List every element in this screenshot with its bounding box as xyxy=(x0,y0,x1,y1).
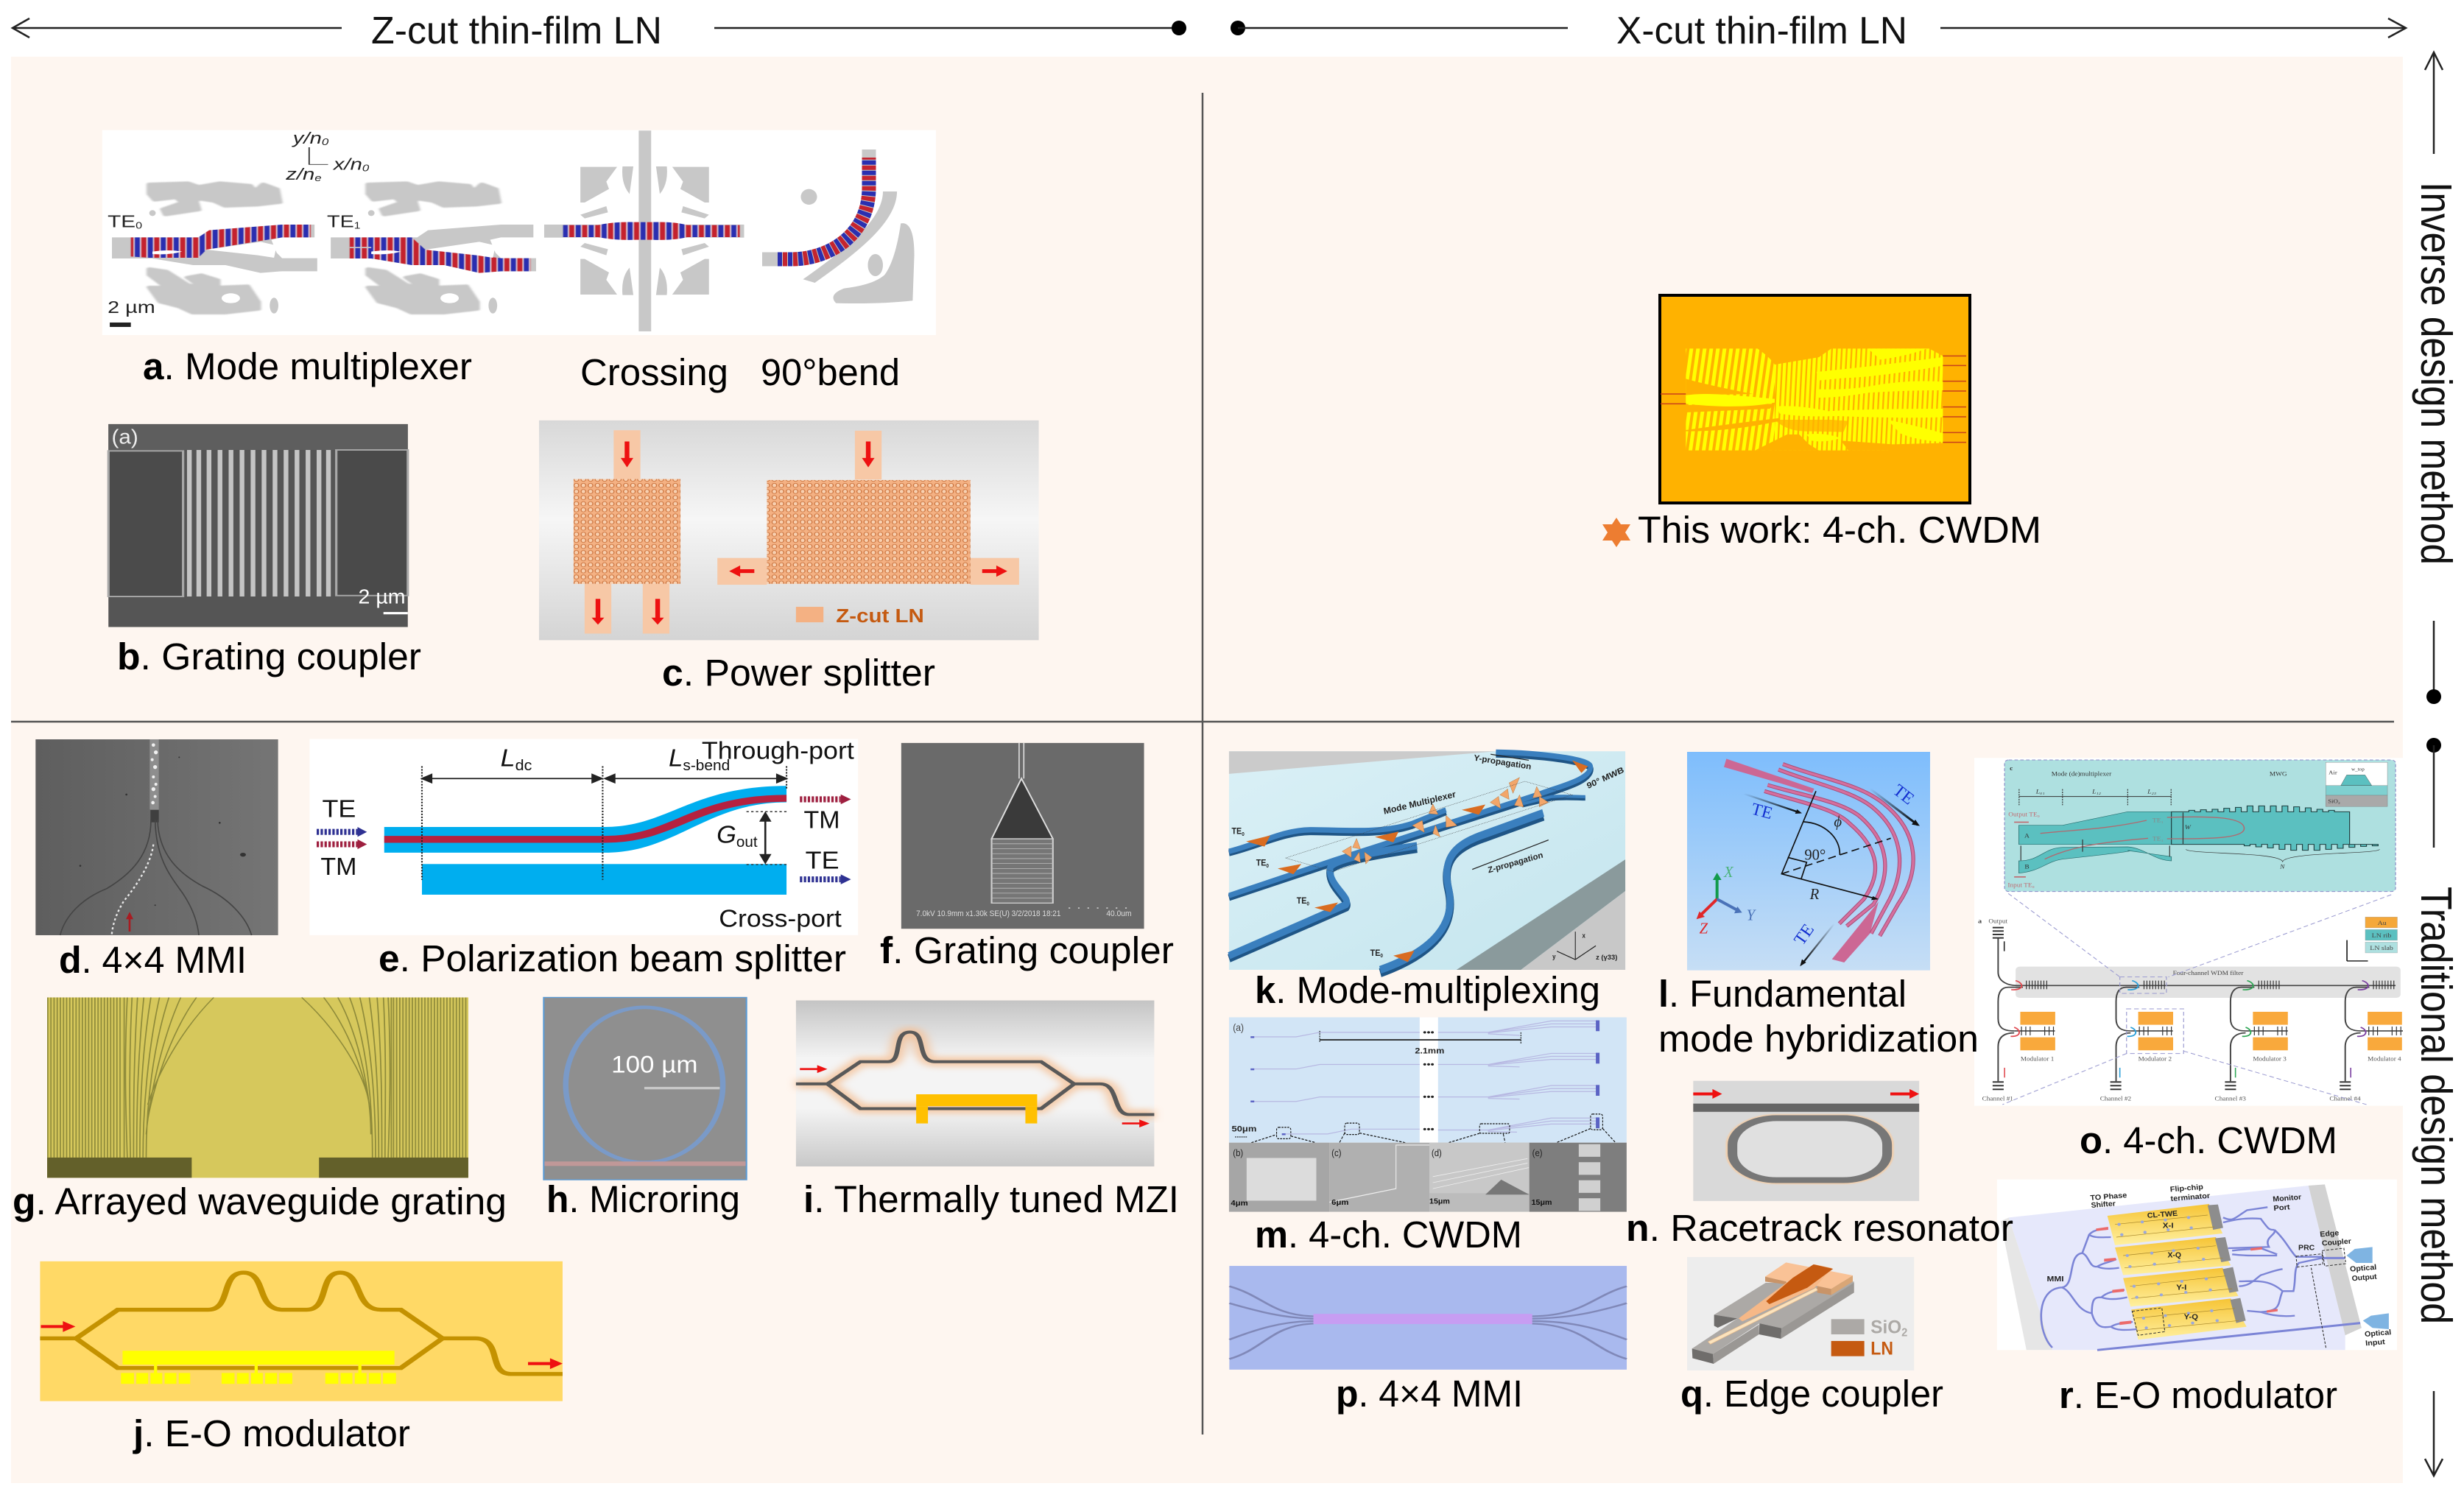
top axis: Z-cut arrow xyxy=(13,18,1186,38)
caption o: o. 4-ch. CWDM xyxy=(2080,1119,2337,1161)
panel a: mode multiplexer, crossing, bend xyxy=(102,129,936,335)
panel r: E-O modulator schematic: PRC xyxy=(2298,1244,2315,1252)
panel: this work 4-channel CWDM layout xyxy=(1660,295,1970,503)
inset: mode demultiplexer and MWG: Input TE₀ xyxy=(2007,881,2035,888)
field axes label: y/n xyxy=(293,129,340,147)
panel k: mode multiplexing 3D layout: Y-propagation xyxy=(1474,753,1532,772)
panel l: fundamental mode hybridization: TE xyxy=(1749,800,1775,823)
legend: LN slab xyxy=(2370,945,2393,951)
panel h: microring xyxy=(543,997,747,1180)
panel m: 4-channel CWDM micrograph: ••• xyxy=(1423,1028,1435,1038)
vertical heading: Inverse design method: Inverse design method xyxy=(2412,182,2461,565)
panel o: 4-channel CWDM schematic: Output xyxy=(1988,918,2007,924)
panel r: E-O modulator schematic: Y-Q xyxy=(2184,1313,2198,1321)
panel e: polarization beam splitter: TM xyxy=(804,806,840,834)
panel m: 4-channel CWDM micrograph: 4μm xyxy=(1231,1199,1248,1207)
inset: mode demultiplexer and MWG: B xyxy=(2024,863,2030,870)
panel j: E-O modulator xyxy=(40,1261,563,1401)
panel o: 4-channel CWDM schematic: Channel #4 xyxy=(2329,1095,2361,1102)
caption f: f. Grating coupler xyxy=(880,929,1174,971)
field axes label: 1 xyxy=(354,220,361,230)
inset: mode demultiplexer and MWG: N xyxy=(2279,863,2286,870)
field axes label: 0 xyxy=(362,163,369,174)
panel p: 4x4 MMI micrograph xyxy=(1229,1266,1627,1370)
caption b: b. Grating coupler xyxy=(117,636,421,677)
panel e: polarization beam splitter: G xyxy=(717,821,747,848)
panel d: 4x4 MMI micrograph xyxy=(35,739,278,935)
panel k: mode multiplexing 3D layout: x xyxy=(1583,932,1585,939)
panel r: E-O modulator schematic: Port xyxy=(2273,1203,2291,1213)
field axes label: 0 xyxy=(135,220,142,230)
panel l: fundamental mode hybridization xyxy=(1687,752,1930,971)
caption r: r. E-O modulator xyxy=(2059,1374,2337,1416)
inset: mode demultiplexer and MWG: A xyxy=(2024,832,2030,839)
panel c: power splitter xyxy=(539,420,1039,640)
panel l: fundamental mode hybridization: Z xyxy=(1700,921,1708,937)
panel k: mode multiplexing 3D layout: 90° MWB xyxy=(1585,765,1625,791)
panel o: 4-channel CWDM schematic: Modulator 4 xyxy=(2368,1055,2401,1062)
heading: X-cut thin-film LN: X-cut thin-film LN xyxy=(1616,10,1907,52)
panel h: microring: 100 µm xyxy=(611,1052,697,1078)
panel o: 4-channel CWDM schematic: Modulator 1 xyxy=(2021,1055,2055,1062)
panel e: polarization beam splitter xyxy=(309,737,858,935)
modulators and gratings xyxy=(2021,981,2401,1035)
panel e: polarization beam splitter: TE xyxy=(806,847,839,874)
top axis: X-cut arrow xyxy=(1231,18,2406,38)
panel o: 4-channel CWDM schematic xyxy=(1974,758,2404,1106)
panel l: fundamental mode hybridization: X xyxy=(1723,865,1734,881)
inset: mode demultiplexer and MWG: W xyxy=(2185,824,2191,831)
four-channel WDM filter band xyxy=(2016,967,2401,998)
caption h: h. Microring xyxy=(546,1178,740,1220)
panel o: 4-channel CWDM schematic: Modulator 2 xyxy=(2139,1055,2172,1062)
caption k: k. Mode-multiplexing xyxy=(1255,969,1600,1011)
panel i: thermally tuned MZI xyxy=(796,1001,1154,1166)
panel m: 4-channel CWDM micrograph: ••• xyxy=(1423,1125,1435,1135)
inset: mode demultiplexer and MWG: L₁₂ xyxy=(2091,788,2101,795)
caption e: e. Polarization beam splitter xyxy=(379,937,846,979)
legend: LN rib xyxy=(2372,932,2392,939)
panel r: E-O modulator schematic xyxy=(1997,1180,2397,1350)
panel f: SEM grating coupler xyxy=(901,743,1144,929)
field axes label: TE xyxy=(108,212,156,231)
panel o: 4-channel CWDM schematic: Four-channel WDM filter xyxy=(2173,970,2243,976)
panel r: E-O modulator schematic: Shifter xyxy=(2091,1200,2116,1210)
panel e: polarization beam splitter: L xyxy=(501,744,522,772)
panel e: polarization beam splitter: out xyxy=(736,834,758,850)
panel b: SEM grating coupler xyxy=(108,424,408,627)
panel m: 4-channel CWDM micrograph: (c) xyxy=(1331,1147,1342,1158)
panel k: mode multiplexing 3D layout: 0 xyxy=(1380,954,1383,959)
panel r: E-O modulator schematic: Optical xyxy=(2350,1263,2377,1273)
panel r: E-O modulator schematic: CL-TWE xyxy=(2147,1209,2178,1220)
panel r: E-O modulator schematic: Output xyxy=(2351,1272,2378,1283)
panel q: edge coupler xyxy=(1687,1257,1914,1370)
panel l: fundamental mode hybridization: R xyxy=(1809,887,1820,903)
panel q: edge coupler: SiO xyxy=(1870,1317,1903,1337)
panel m: 4-channel CWDM micrograph: ••• xyxy=(1423,1060,1435,1070)
inset: mode demultiplexer and MWG: w_top xyxy=(2351,767,2365,772)
panel r: E-O modulator schematic: TO Phase xyxy=(2090,1191,2127,1203)
legend xyxy=(2365,917,2397,953)
panel e: polarization beam splitter: Through-port xyxy=(702,737,854,764)
panel r: E-O modulator schematic: MMI xyxy=(2047,1275,2064,1284)
panel o: 4-channel CWDM schematic: a xyxy=(1978,918,1982,924)
field axes label: 0 xyxy=(322,136,328,147)
panel b: SEM grating coupler: 2 µm xyxy=(359,585,406,608)
panel l: fundamental mode hybridization: ϕ xyxy=(1834,814,1842,831)
panel k: mode multiplexing 3D layout: TE xyxy=(1256,859,1266,868)
panel e: polarization beam splitter: TM xyxy=(320,853,356,881)
panel n: racetrack resonator xyxy=(1693,1081,1919,1201)
caption c: c. Power splitter xyxy=(662,652,935,694)
panel k: mode multiplexing 3D layout: 0 xyxy=(1306,901,1309,907)
panel k: mode multiplexing 3D layout: Z-propagation xyxy=(1487,851,1544,876)
panel e: polarization beam splitter: s-bend xyxy=(683,757,730,773)
inset: mode demultiplexer and MWG: TE₁ xyxy=(2153,835,2164,842)
field axes label: 2 µm xyxy=(108,298,155,317)
caption this work: This work: 4-ch. CWDM xyxy=(1638,509,2041,551)
panel o: 4-channel CWDM schematic: Channel #3 xyxy=(2215,1095,2246,1102)
panel l: fundamental mode hybridization: Y xyxy=(1747,907,1757,923)
panel r: E-O modulator schematic: terminator xyxy=(2170,1191,2211,1203)
caption q: q. Edge coupler xyxy=(1680,1373,1943,1415)
panel l: fundamental mode hybridization: TE xyxy=(1890,781,1918,809)
panel r: E-O modulator schematic: X-I xyxy=(2163,1222,2174,1230)
panel r: E-O modulator schematic: Monitor xyxy=(2273,1193,2302,1203)
panel r: E-O modulator schematic: Coupler xyxy=(2321,1237,2351,1247)
panel q: edge coupler: LN xyxy=(1870,1339,1893,1359)
panel m: 4-channel CWDM micrograph: (a) xyxy=(1233,1021,1244,1033)
caption d: d. 4×4 MMI xyxy=(59,939,247,981)
panel k: mode multiplexing 3D layout: z (γ33) xyxy=(1596,954,1618,961)
panel r: E-O modulator schematic: Input xyxy=(2365,1338,2386,1348)
panel m: 4-channel CWDM micrograph: 2.1mm xyxy=(1415,1047,1445,1056)
panel o: 4-channel CWDM schematic: Modulator 3 xyxy=(2253,1055,2287,1062)
panel k: mode multiplexing 3D layout: Mode Multiplexer xyxy=(1383,790,1457,817)
inset: mode demultiplexer and MWG: SiO₂ xyxy=(2328,798,2340,804)
legend: Au xyxy=(2378,920,2387,926)
field axes label xyxy=(108,129,369,327)
caption l: l. Fundamental xyxy=(1658,973,1907,1015)
panel m: 4-channel CWDM micrograph: (d) xyxy=(1432,1147,1442,1158)
caption j: j. E-O modulator xyxy=(133,1412,410,1454)
panel o: 4-channel CWDM schematic: Channel #1 xyxy=(1982,1095,2013,1102)
heading: Z-cut thin-film LN: Z-cut thin-film LN xyxy=(371,10,662,52)
panel b: SEM grating coupler: (a) xyxy=(112,426,138,448)
caption l second line: mode hybridization xyxy=(1658,1018,1979,1060)
inset: mode demultiplexer and MWG: Output TE₀ xyxy=(2008,811,2040,817)
field axes label: TE xyxy=(327,212,376,231)
caption 90 degree bend: 90°bend xyxy=(761,351,900,393)
panel k: mode multiplexing 3D layout: TE xyxy=(1297,897,1306,906)
inset: mode demultiplexer and MWG: c xyxy=(2010,765,2013,772)
panel k: mode multiplexing 3D layout: 0 xyxy=(1242,832,1245,837)
field axes label: x/n xyxy=(334,155,381,173)
panel l: fundamental mode hybridization: 90° xyxy=(1804,848,1826,864)
panel f: SEM grating coupler: 7.0kV 10.9mm x1.30k SE(U) 3/2/2018 18:21 xyxy=(916,909,1060,918)
panel m: 4-channel CWDM micrograph: 6μm xyxy=(1331,1198,1348,1206)
panel r: E-O modulator schematic: Optical xyxy=(2365,1328,2392,1339)
inset: mode demultiplexer and MWG: L₂₃ xyxy=(2147,788,2156,795)
panel e: polarization beam splitter: dc xyxy=(515,757,532,773)
panel g: arrayed waveguide grating xyxy=(47,997,468,1178)
panel k: mode multiplexing 3D layout: TE xyxy=(1231,827,1242,837)
panel m: 4-channel CWDM micrograph: 15μm xyxy=(1429,1197,1450,1205)
panel e: polarization beam splitter: L xyxy=(669,744,691,772)
inset: mode demultiplexer and MWG: Mode (de)multiplexer xyxy=(2052,770,2111,777)
panel o: 4-channel CWDM schematic: Channel #2 xyxy=(2100,1095,2132,1102)
caption n: n. Racetrack resonator xyxy=(1626,1207,2013,1249)
panel k: mode multiplexing 3D layout xyxy=(1229,751,1625,973)
caption p: p. 4×4 MMI xyxy=(1336,1373,1523,1415)
caption m: m. 4-ch. CWDM xyxy=(1255,1214,1522,1256)
panel c: power splitter: Z-cut LN xyxy=(836,606,924,627)
caption i: i. Thermally tuned MZI xyxy=(803,1178,1179,1220)
panel m: 4-channel CWDM micrograph: (b) xyxy=(1233,1147,1243,1158)
inset: mode demultiplexer and MWG: TE₁ xyxy=(2153,817,2164,823)
vertical heading: Traditional design method: Traditional design method xyxy=(2412,887,2461,1324)
panel l: fundamental mode hybridization: TE xyxy=(1790,920,1818,948)
panel k: mode multiplexing 3D layout: TE xyxy=(1370,948,1380,958)
inset: mode demultiplexer and MWG: L₀₁ xyxy=(2035,788,2045,795)
panel k: mode multiplexing 3D layout: 0 xyxy=(1266,863,1269,869)
caption a: a. Mode multiplexer xyxy=(143,345,472,387)
icon: star xyxy=(1602,518,1630,547)
panel e: polarization beam splitter: Cross-port xyxy=(719,905,842,932)
panel r: E-O modulator schematic: Y-I xyxy=(2176,1284,2186,1292)
inset: mode demultiplexer and MWG xyxy=(2007,762,2387,888)
panel f: SEM grating coupler: 40.0um xyxy=(1106,909,1131,918)
inset: mode demultiplexer and MWG: Air xyxy=(2329,770,2337,775)
field axes label: z/n xyxy=(286,165,334,183)
inset: mode demultiplexer and MWG: MWG xyxy=(2270,770,2287,777)
panel m: 4-channel CWDM micrograph: ••• xyxy=(1423,1093,1435,1102)
panel r: E-O modulator schematic: Edge xyxy=(2320,1229,2340,1239)
panel r: E-O modulator schematic: X-Q xyxy=(2167,1251,2181,1259)
panel k: mode multiplexing 3D layout: y xyxy=(1552,952,1556,960)
caption crossing: Crossing xyxy=(580,351,728,393)
panel m: 4-channel CWDM micrograph: 50μm xyxy=(1231,1125,1257,1134)
panel m: 4-channel CWDM micrograph: (e) xyxy=(1532,1147,1543,1158)
panel r: E-O modulator schematic: Flip-chip xyxy=(2169,1183,2204,1194)
panel q: edge coupler: 2 xyxy=(1901,1326,1907,1339)
right axis: traditional design arrow xyxy=(2425,738,2443,1476)
panel m: 4-channel CWDM micrograph xyxy=(1229,1017,1627,1212)
field axes label: e xyxy=(314,172,322,183)
right axis: inverse design arrow xyxy=(2425,52,2443,704)
caption g: g. Arrayed waveguide grating xyxy=(13,1180,507,1222)
panel e: polarization beam splitter: TE xyxy=(322,795,356,823)
90 degree bend field xyxy=(762,149,869,259)
schematic waveguides xyxy=(1998,937,2403,1081)
panel m: 4-channel CWDM micrograph: 15μm xyxy=(1532,1198,1552,1206)
